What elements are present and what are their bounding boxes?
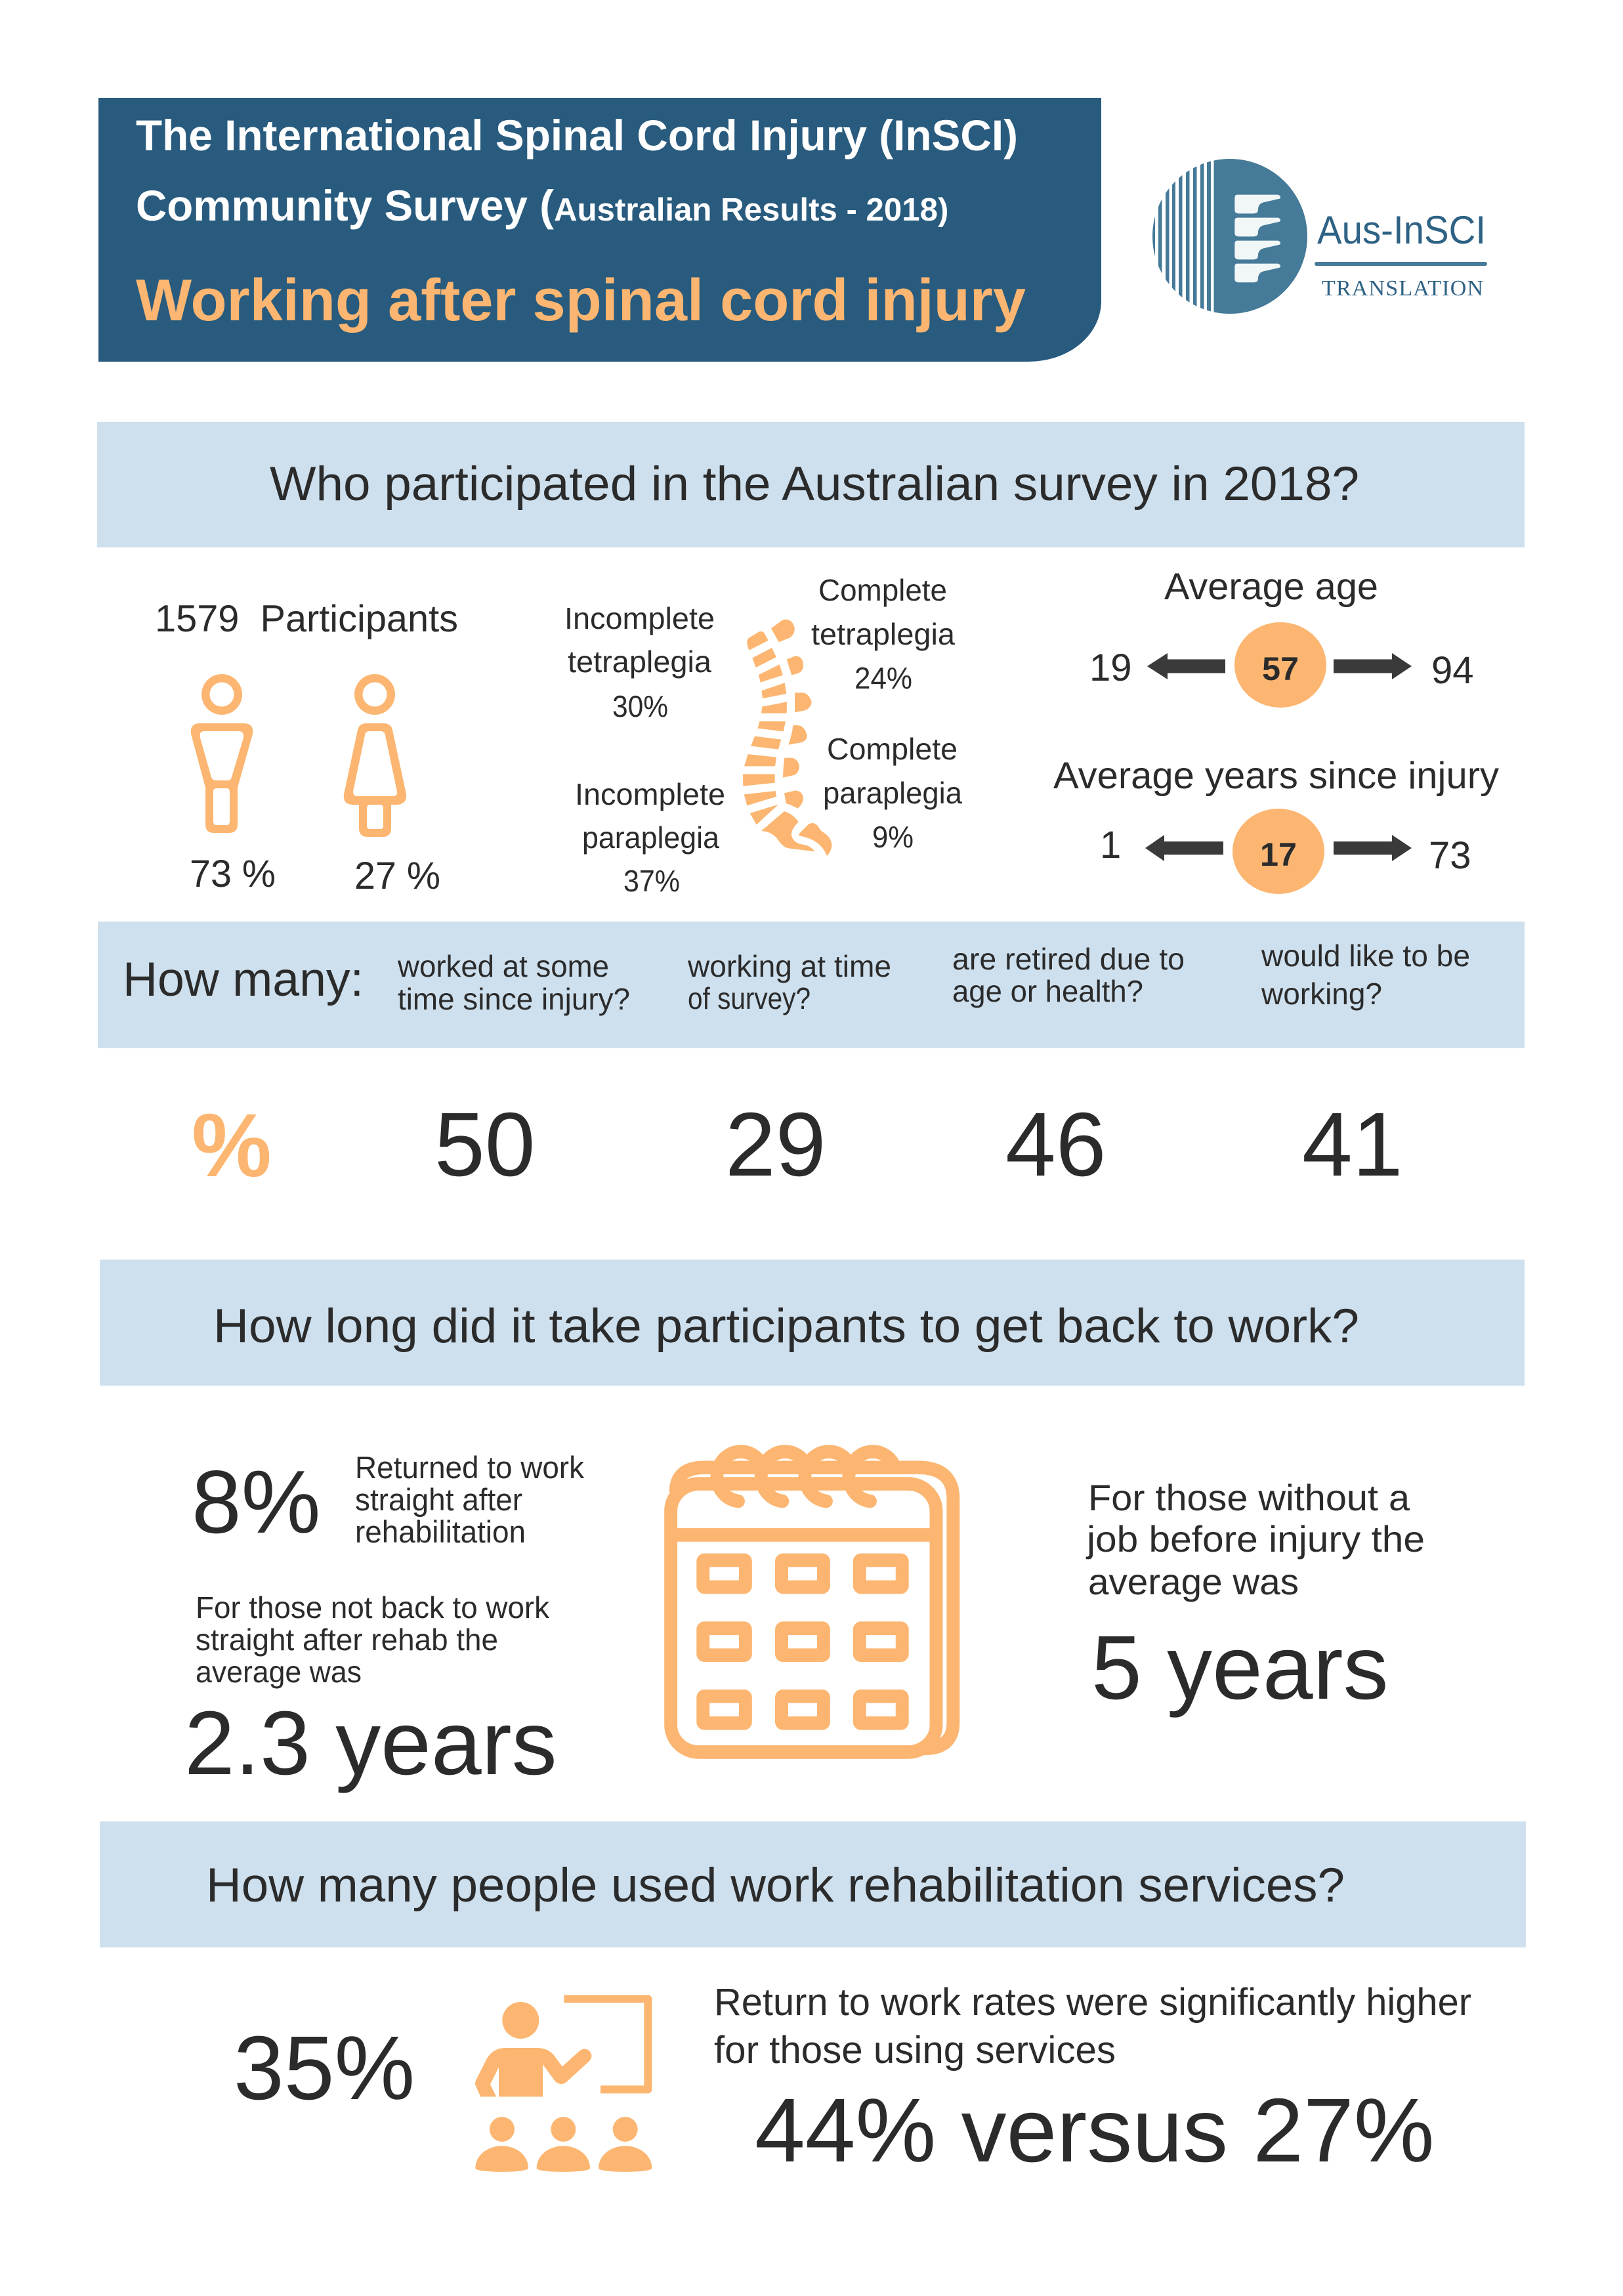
logo: Aus-InSCI Translation [1152, 151, 1487, 322]
right return-to-work stats [1086, 1477, 1425, 1718]
label: incomplete paraplegia: 37% [623, 864, 680, 898]
icon: male figure [191, 674, 253, 833]
text: not back to work: straight after rehab the [196, 1623, 498, 1657]
section heading: how long: How long did it take participants to get back to work? [213, 1298, 1359, 1353]
label: complete tetraplegia: 24% [854, 661, 912, 695]
column label: would like: would like to be [1261, 939, 1470, 973]
label: incomplete tetraplegia: Incomplete [564, 601, 715, 635]
participants panel [155, 598, 458, 897]
icon: spine [743, 620, 832, 856]
average age circle: 57 [1262, 650, 1299, 687]
stat: would like to work: 41 [1302, 1094, 1403, 1195]
text: without a job [1086, 1477, 1425, 1602]
text: not back to work: average was [196, 1655, 362, 1689]
label: complete tetraplegia: tetraplegia [811, 617, 955, 651]
text: without a job: job before injury the [1086, 1518, 1425, 1560]
arrow: right [1334, 653, 1412, 679]
logo: Aus-InSCI Translation: Aus-InSCI [1317, 208, 1486, 252]
label: complete tetraplegia [811, 573, 955, 695]
return to work comparison [714, 1981, 1471, 2181]
average years circle: 17 [1260, 836, 1297, 873]
maximum years: 73 [1429, 834, 1471, 877]
section heading: work rehabilitation services: How many people used work rehabilitation services? [206, 1858, 1345, 1912]
label: incomplete tetraplegia: 30% [612, 689, 668, 723]
column label: retired: are retired due to [952, 942, 1185, 976]
title line 1: The International Spinal Cord Injury (InSCI) [136, 112, 1018, 159]
text: return to work rates: for those using services [714, 2029, 1116, 2072]
column label: worked: time since injury? [398, 982, 630, 1016]
text: returned to work [355, 1450, 584, 1549]
header banner [98, 98, 1101, 362]
title line 2: Community Survey (Australian Results - 2018) [136, 182, 948, 230]
section heading: how many [98, 922, 1525, 1048]
section heading: work rehabilitation services [100, 1821, 1526, 1947]
text: not back to work [196, 1590, 550, 1689]
text: not back to work: For those not back to work [196, 1590, 550, 1625]
column label: worked: worked at some [397, 949, 609, 983]
average years circle [1233, 809, 1324, 894]
text: return to work rates [714, 1981, 1471, 2072]
column label: would like [1261, 939, 1470, 1011]
maximum age: 94 [1431, 649, 1474, 692]
label: incomplete paraplegia: paraplegia [582, 820, 719, 855]
column label: worked [397, 949, 630, 1016]
main title: Working after spinal cord injury [136, 268, 1026, 333]
stat: 8%: 8% [192, 1452, 321, 1552]
icon: teacher and audience [475, 1999, 652, 2172]
female percentage: 27 % [354, 855, 440, 897]
label: complete paraplegia: 9% [872, 820, 914, 854]
column label: retired: age or health? [952, 974, 1143, 1008]
average years since injury panel [1053, 755, 1499, 894]
label: incomplete tetraplegia [564, 601, 715, 723]
label: complete paraplegia: Complete [827, 732, 958, 766]
column label: working [687, 949, 891, 1015]
stat: 5 years: 5 years [1091, 1617, 1389, 1718]
percent symbol: % [192, 1095, 272, 1196]
section heading: who participated [97, 422, 1525, 547]
minimum age: 19 [1089, 647, 1132, 689]
text: returned to work: straight after [355, 1482, 522, 1517]
logo: Aus-InSCI Translation: TRANSLATION [1322, 276, 1483, 301]
section heading: how long [100, 1260, 1525, 1386]
section heading: who participated: Who participated in the Australian survey in 2018? [270, 457, 1359, 511]
label: complete paraplegia: paraplegia [823, 776, 962, 810]
icon: female figure [344, 674, 406, 837]
injury type panel [564, 573, 962, 898]
text: returned to work: Returned to work [355, 1450, 584, 1485]
arrow: left [1145, 835, 1223, 861]
text: returned to work: rehabilitation [355, 1514, 526, 1549]
arrow: right [1334, 835, 1412, 861]
stat: 2.3 years: 2.3 years [184, 1693, 557, 1794]
heading: average age: Average age [1164, 566, 1378, 608]
section heading: how many: How many: [123, 952, 364, 1006]
text: without a job: average was [1088, 1561, 1299, 1602]
average age panel [1089, 566, 1474, 708]
text: without a job: For those without a [1088, 1477, 1410, 1518]
stat: working at survey: 29 [725, 1094, 826, 1195]
label: complete tetraplegia: Complete [818, 573, 947, 607]
column label: working: of survey? [688, 981, 811, 1015]
left return-to-work stats [184, 1450, 584, 1794]
stat: worked since injury: 50 [434, 1094, 536, 1195]
column label: working: working at time [687, 949, 891, 983]
icon: calendar [671, 1452, 953, 1752]
arrow: left [1147, 653, 1225, 679]
label: incomplete paraplegia: Incomplete [575, 777, 725, 811]
stat: 44% versus 27%: 44% versus 27% [755, 2080, 1435, 2181]
label: incomplete tetraplegia: tetraplegia [568, 645, 711, 679]
label: incomplete paraplegia [575, 777, 725, 898]
column label: would like: working? [1261, 977, 1382, 1011]
average age circle [1234, 622, 1326, 708]
participants count: 1579 Participants [155, 598, 458, 640]
stat: 35%: 35% [234, 2018, 415, 2119]
minimum years: 1 [1100, 824, 1121, 866]
label: complete paraplegia [823, 732, 962, 854]
column label: retired [952, 942, 1185, 1008]
stat: retired: 46 [1005, 1094, 1107, 1195]
male percentage: 73 % [190, 853, 276, 895]
statistics row [192, 1094, 1403, 1196]
heading: average years since injury: Average years since injury [1053, 755, 1499, 797]
text: return to work rates: Return to work rates were significantly higher [714, 1981, 1471, 2024]
